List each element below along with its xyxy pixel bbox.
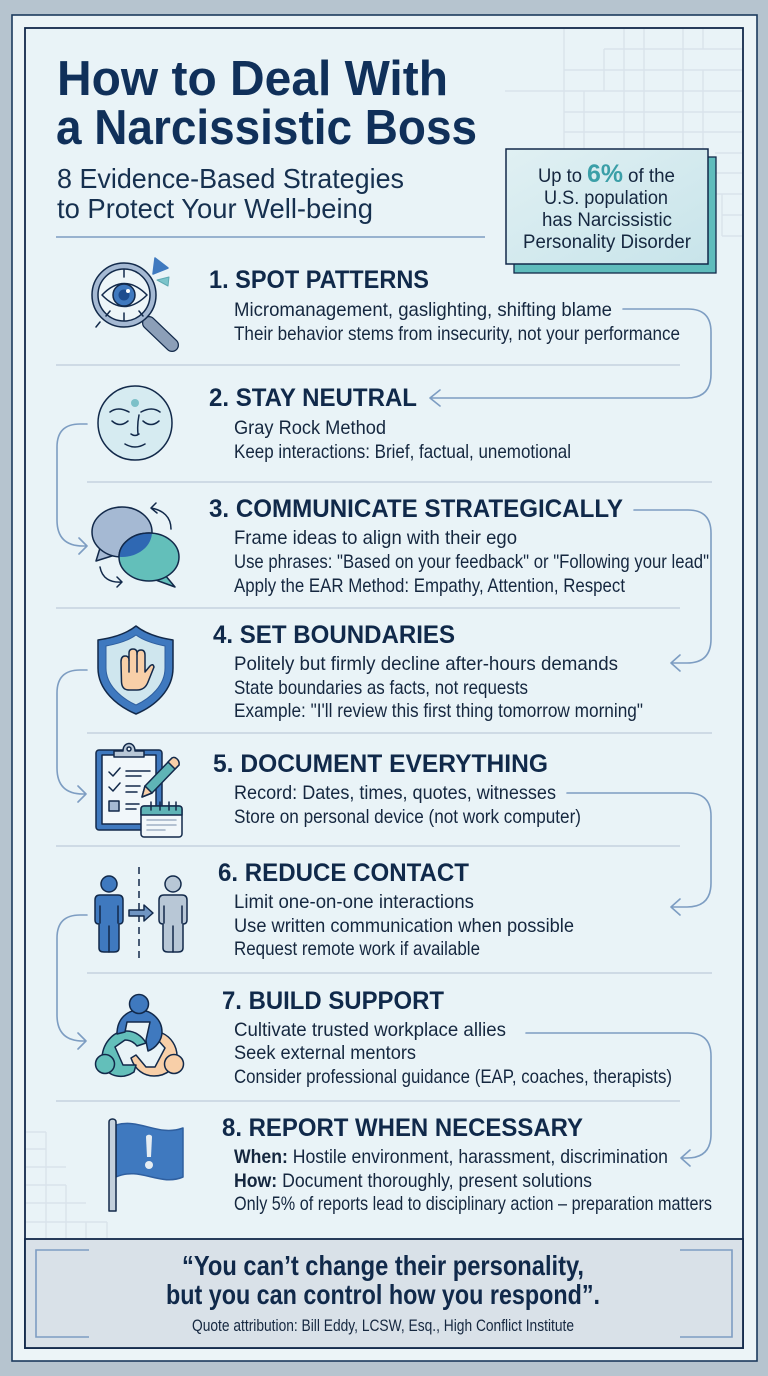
step 4: set boundaries: 4. SET BOUNDARIES bbox=[213, 621, 455, 649]
arrow: step 2 to 3 bbox=[57, 424, 87, 554]
step 6: reduce contact: 6. REDUCE CONTACT bbox=[218, 859, 469, 887]
step 8: report when necessary: When: Hostile environment, harassment, discrimination bbox=[234, 1146, 668, 1168]
step 3: communicate strategically: Apply the EAR Method: Empathy, Attention, Respect bbox=[234, 575, 626, 597]
callout: 6% statistic: Up to bbox=[538, 166, 582, 187]
callout: 6% statistic: U.S. population bbox=[544, 188, 668, 209]
icon: three linked people bbox=[96, 994, 184, 1076]
step 7: build support: 7. BUILD SUPPORT bbox=[222, 987, 444, 1015]
icon: warning flag bbox=[109, 1119, 183, 1211]
step 2: stay neutral: Gray Rock Method bbox=[234, 417, 386, 439]
arrow: step 4 to 5 bbox=[57, 670, 87, 802]
step 5: document everything bbox=[96, 744, 581, 837]
title bbox=[56, 52, 477, 155]
step 5: document everything: Record: Dates, times, quotes, witnesses bbox=[234, 782, 556, 804]
step 3: communicate strategically bbox=[92, 495, 709, 597]
step 2: stay neutral bbox=[98, 384, 571, 463]
step 7: build support bbox=[96, 987, 672, 1088]
step 8: report when necessary: 8. REPORT WHEN NECESSARY bbox=[222, 1114, 583, 1142]
subtitle: to Protect Your Well-being bbox=[57, 193, 373, 224]
arrow: step 1 to 2 bbox=[430, 309, 711, 406]
quote text: “You can’t change their personality, bbox=[182, 1250, 584, 1281]
arrow: step 3 to 4 bbox=[634, 510, 711, 671]
step 4: set boundaries: Politely but firmly decline after-hours demands bbox=[234, 653, 618, 675]
subtitle bbox=[57, 163, 404, 224]
step 2: stay neutral: Keep interactions: Brief, factual, unemotional bbox=[234, 441, 571, 463]
subtitle: 8 Evidence-Based Strategies bbox=[57, 163, 404, 194]
step 3: communicate strategically: Frame ideas to align with their ego bbox=[234, 527, 517, 549]
step 1: spot patterns: Their behavior stems from insecurity, not your performance bbox=[234, 323, 680, 345]
arrow: step 6 to 7 bbox=[57, 915, 87, 1049]
step 7: build support: Cultivate trusted workplace allies bbox=[234, 1019, 506, 1041]
step 4: set boundaries: State boundaries as facts, not requests bbox=[234, 677, 528, 699]
icon: clipboard, pencil and calendar bbox=[96, 744, 182, 837]
quote text: but you can control how you respond”. bbox=[166, 1279, 600, 1310]
icon: magnifying glass with eye bbox=[92, 258, 172, 345]
step 1: spot patterns: 1. SPOT PATTERNS bbox=[209, 266, 429, 294]
panel: quote bbox=[25, 1239, 743, 1348]
icon: shield with hand bbox=[98, 626, 173, 714]
step 1: spot patterns: Micromanagement, gaslighting, shifting blame bbox=[234, 299, 612, 321]
step 7: build support: Seek external mentors bbox=[234, 1042, 416, 1064]
title: a Narcissistic Boss bbox=[56, 101, 477, 155]
step 1: spot patterns bbox=[92, 258, 680, 345]
callout: 6% statistic: has Narcissistic bbox=[542, 210, 672, 231]
step 7: build support: Consider professional guidance (EAP, coaches, therapists) bbox=[234, 1066, 672, 1088]
step 6: reduce contact bbox=[95, 859, 574, 960]
step 6: reduce contact: Use written communication when possible bbox=[234, 915, 574, 937]
quote text bbox=[166, 1250, 600, 1310]
icon: speech bubbles bbox=[92, 503, 179, 587]
step 8: report when necessary bbox=[109, 1114, 712, 1215]
callout: 6% statistic bbox=[506, 149, 716, 273]
callout: 6% statistic: Personality Disorder bbox=[523, 232, 692, 253]
icon: two people with divider bbox=[95, 867, 187, 960]
step 5: document everything: Store on personal device (not work computer) bbox=[234, 806, 581, 828]
callout: 6% statistic: 6% bbox=[587, 160, 623, 188]
step 5: document everything: 5. DOCUMENT EVERYTHING bbox=[213, 750, 548, 778]
title: How to Deal With bbox=[57, 52, 448, 106]
callout: 6% statistic: of the bbox=[628, 166, 675, 187]
step 6: reduce contact: Request remote work if available bbox=[234, 938, 480, 960]
step 3: communicate strategically: 3. COMMUNICATE STRATEGICALLY bbox=[209, 495, 623, 523]
step 2: stay neutral: 2. STAY NEUTRAL bbox=[209, 384, 417, 412]
step 4: set boundaries: Example: "I'll review this first thing tomorrow morning" bbox=[234, 700, 643, 722]
quote attribution: Quote attribution: Bill Eddy, LCSW, Esq., High Conflict Institute bbox=[192, 1316, 574, 1335]
step 4: set boundaries bbox=[98, 621, 643, 722]
step 8: report when necessary: How: Document thoroughly, present solutions bbox=[234, 1170, 592, 1192]
icon: calm face bbox=[98, 386, 172, 460]
step 6: reduce contact: Limit one-on-one interactions bbox=[234, 891, 474, 913]
arrow: step 5 to 6 bbox=[567, 793, 711, 915]
arrow: step 7 to 8 bbox=[526, 1033, 711, 1166]
